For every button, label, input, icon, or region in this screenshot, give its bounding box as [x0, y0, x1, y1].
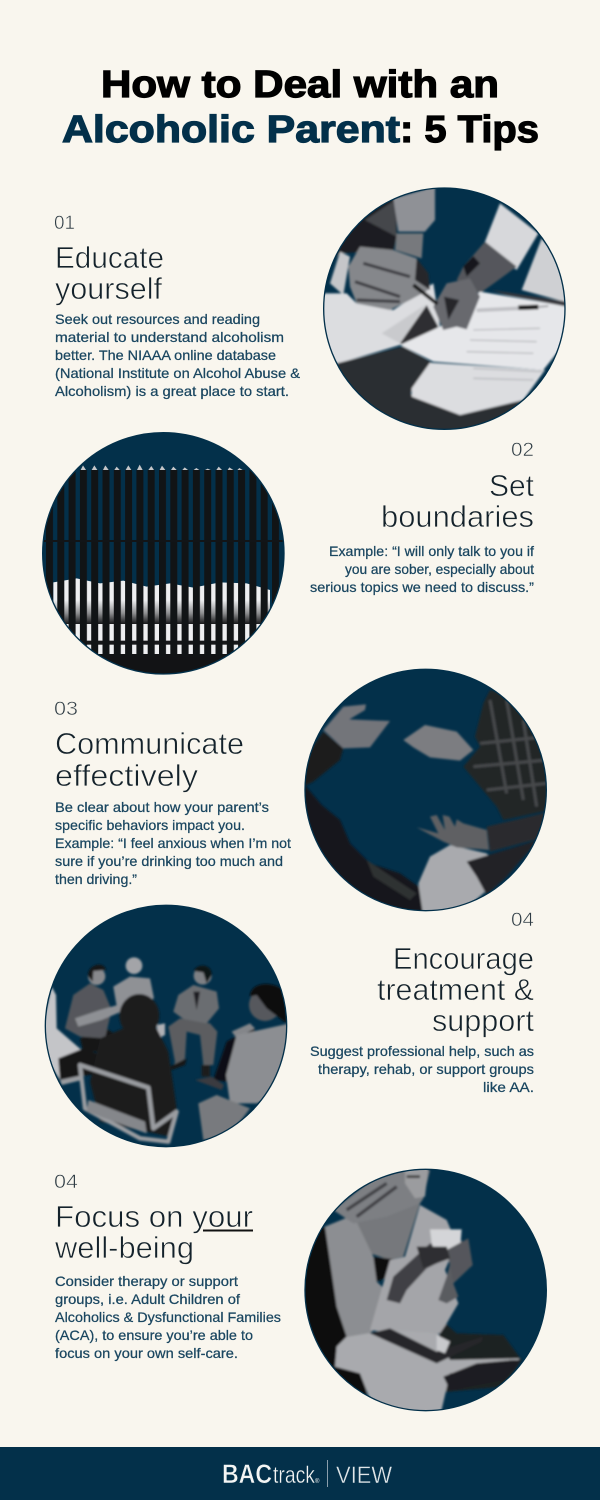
body text	[310, 543, 534, 595]
heading: educate yourself	[55, 240, 164, 306]
heading: educate yourself: yourself	[55, 271, 162, 306]
body text: sure if you’re drinking too much and	[55, 853, 283, 869]
tip number 02: 02	[511, 440, 534, 461]
title: Alcoholic Parent	[62, 109, 400, 151]
heading: encourage treatment and support	[377, 941, 534, 1038]
heading: focus on your well-being: Focus on your	[55, 1199, 253, 1234]
logo: BACtrack	[222, 1459, 320, 1489]
panel: tip 5 focus on your well-being	[54, 1167, 546, 1417]
heading: set boundaries	[381, 468, 534, 534]
panel: tip 3 communicate effectively	[54, 669, 550, 917]
tip number 04: 04	[511, 910, 534, 931]
photo: support group circle	[43, 905, 297, 1147]
panel: tip 2 set boundaries	[40, 433, 534, 677]
body text: Example: “I will only talk to you if	[329, 543, 534, 559]
heading: focus on your well-being: well-being	[54, 1230, 194, 1265]
heading: set boundaries: Set	[489, 468, 534, 503]
heading: encourage treatment and support: Encourage	[393, 941, 534, 976]
body text: Be clear about how your parent’s	[55, 799, 269, 815]
body text: material to understand alcoholism	[55, 329, 284, 345]
body text: Seek out resources and reading	[55, 311, 260, 327]
body text	[55, 311, 301, 399]
body text: Example: “I feel anxious when I’m not	[55, 835, 291, 851]
logo: BACtrack: ®	[315, 1478, 320, 1485]
body text: you are sober, especially about	[345, 561, 534, 577]
title: : 5 Tips	[400, 109, 539, 151]
logo: BACtrack: BAC	[222, 1459, 272, 1489]
body text	[55, 1273, 281, 1361]
body text: then driving.”	[55, 871, 137, 887]
photo: woman holding a cup	[300, 1167, 546, 1417]
body text: Suggest professional help, such as	[310, 1043, 534, 1059]
body text: (ACA), to ensure you’re able to	[55, 1327, 253, 1343]
heading: focus on your well-being	[54, 1199, 253, 1265]
photo: hands signing papers	[320, 187, 570, 437]
title	[62, 64, 539, 151]
body text: Alcoholism) is a great place to start.	[55, 383, 289, 399]
body text	[55, 799, 291, 887]
panel: tip 1 educate yourself	[54, 187, 570, 437]
heading: communicate effectively: Communicate	[55, 726, 244, 761]
heading: educate yourself: Educate	[55, 240, 164, 275]
logo: BACtrack: track	[273, 1462, 316, 1489]
heading: communicate effectively	[55, 726, 244, 793]
body text: like AA.	[483, 1079, 534, 1095]
footer bar	[0, 1447, 600, 1500]
heading: communicate effectively: effectively	[55, 758, 199, 793]
tip number 04 (as printed): 04	[54, 1172, 78, 1193]
body text: Consider therapy or support	[55, 1273, 238, 1289]
heading: set boundaries: boundaries	[381, 499, 534, 534]
photo: gesturing hands in conversation	[300, 669, 550, 917]
logo divider	[327, 1460, 328, 1487]
tip number 03: 03	[54, 699, 78, 720]
title: How to Deal with an	[101, 64, 499, 106]
body text: better. The NIAAA online database	[55, 347, 276, 363]
body text: (National Institute on Alcohol Abuse &	[55, 365, 301, 381]
tip number 01: 01	[54, 213, 75, 234]
body text: groups, i.e. Adult Children of	[55, 1291, 240, 1307]
heading: encourage treatment and support: treatment &	[377, 972, 534, 1007]
body text: specific behaviors impact you.	[55, 817, 245, 833]
body text: serious topics we need to discuss.”	[310, 579, 534, 595]
body text	[310, 1043, 534, 1095]
heading: encourage treatment and support: support	[432, 1003, 534, 1038]
photo: metal fence	[40, 433, 293, 677]
logo: VIEW: VIEW	[336, 1462, 392, 1489]
body text: therapy, rehab, or support groups	[318, 1061, 534, 1077]
body text: Alcoholics & Dysfunctional Families	[55, 1309, 281, 1325]
panel: tip 4 encourage treatment and support	[43, 905, 534, 1147]
body text: focus on your own self-care.	[55, 1345, 238, 1361]
